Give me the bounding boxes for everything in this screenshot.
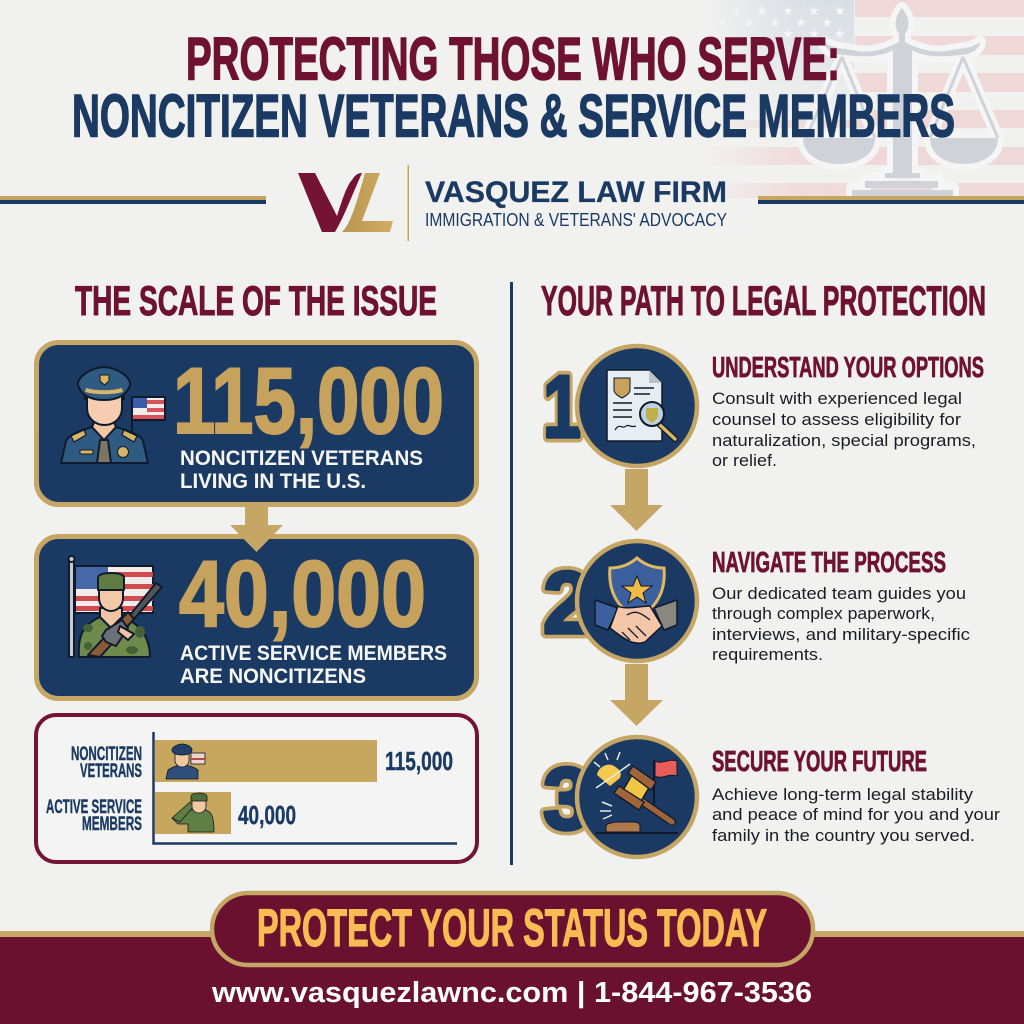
header rule: left [0, 196, 266, 204]
caption: LIVING IN THE U.S. [180, 470, 366, 493]
header rule: right [758, 196, 1024, 204]
number 2: 2 [543, 553, 591, 652]
step 2 text: through complex paperwork, [712, 604, 935, 623]
step 3 text: Achieve long-term legal stability [712, 785, 974, 804]
number 3: 3 [543, 749, 591, 848]
value: 115,000 [385, 746, 453, 776]
background flag and scales of justice: ★ [756, 3, 768, 18]
logo: Vasquez Law Firm: VASQUEZ LAW FIRM [425, 176, 727, 209]
call to action button [212, 893, 813, 965]
chart axes [154, 732, 457, 844]
step 1 text: counsel to assess eligibility for [712, 410, 961, 429]
footer band [0, 931, 1024, 1024]
panel: 115,000 veterans [36, 342, 476, 504]
arrow [610, 664, 663, 726]
background flag and scales of justice: ★ [717, 15, 729, 30]
background flag and scales of justice [736, 0, 1024, 198]
background flag and scales of justice: ★ [808, 3, 820, 18]
value: 40,000 [238, 800, 296, 830]
heading: the scale of the issue: THE SCALE OF THE ISSUE [75, 277, 437, 324]
step 2 [543, 541, 971, 726]
background flag and scales of justice: ★ [834, 3, 846, 18]
statistic: 40,000: 40,000 [179, 541, 426, 646]
background flag and scales of justice: ★ [834, 26, 846, 41]
background flag and scales of justice: ★ [795, 15, 807, 30]
step 1 text: or relief. [712, 451, 777, 470]
caption [180, 447, 423, 493]
step 3 [543, 737, 1000, 857]
bar: noncitizen veterans [71, 740, 453, 782]
step 1 text: Consult with experienced legal [712, 389, 962, 408]
bar label: NONCITIZEN [71, 743, 142, 765]
step 3 text: and peace of mind for you and your [712, 805, 1000, 824]
arrow [610, 469, 663, 531]
step 2 text [712, 547, 971, 664]
background flag and scales of justice: ★ [743, 15, 755, 30]
icon: small officer [166, 744, 205, 779]
background flag and scales of justice: ★ [782, 3, 794, 18]
logo: Vasquez Law Firm: IMMIGRATION & VETERANS' ADVOCACY [425, 210, 727, 230]
step 3 text: family in the country you served. [712, 826, 975, 845]
icon: officer with flag [61, 367, 165, 463]
background flag and scales of justice: ★ [808, 26, 820, 41]
icon circle: document review [577, 346, 697, 466]
step 2 text: interviews, and military-specific [712, 625, 971, 644]
number 2: 2 [543, 553, 591, 652]
panel: 40,000 service members [36, 536, 476, 698]
step 2 text: requirements. [712, 645, 823, 664]
bar label [46, 796, 142, 835]
contact line: www.vasquezlawnc.com | 1-844-967-3536 [211, 977, 812, 1009]
number 3: 3 [543, 749, 591, 848]
background flag and scales of justice: ★ [703, 3, 715, 18]
icon: saluting soldier [172, 793, 214, 832]
step 1 [543, 346, 984, 531]
panel: bar chart [36, 715, 477, 862]
scales halo [803, 8, 998, 197]
statistic: 115,000: 115,000 [173, 348, 444, 453]
logo: Vasquez Law Firm [298, 165, 727, 241]
number 1: 1 [543, 357, 581, 456]
icon circle: gavel and flag [577, 737, 697, 857]
title [72, 26, 955, 150]
background flag and scales of justice: ★ [730, 3, 742, 18]
step 1 text [712, 352, 984, 470]
background flag and scales of justice: ★ [769, 15, 781, 30]
caption: ACTIVE SERVICE MEMBERS [180, 642, 447, 665]
background flag and scales of justice: ★ [782, 26, 794, 41]
step 1 text: naturalization, special programs, [712, 431, 976, 450]
caption [180, 642, 447, 688]
arrow: between stat panels [230, 507, 283, 552]
bar label: ACTIVE SERVICE [46, 796, 142, 818]
caption: NONCITIZEN VETERANS [180, 447, 423, 470]
column divider [510, 282, 513, 865]
number 1: 1 [543, 357, 581, 456]
bar label: VETERANS [80, 760, 142, 782]
step 3 text [712, 746, 1000, 845]
bar label [71, 743, 142, 782]
background flag and scales of justice: ★ [821, 15, 833, 30]
icon circle: shield and handshake [577, 541, 697, 661]
step 2 text: Our dedicated team guides you [712, 584, 966, 603]
icon: soldier with flag [68, 556, 162, 657]
bar label: MEMBERS [82, 813, 142, 835]
bar: active service members [46, 792, 296, 835]
caption: ARE NONCITIZENS [180, 665, 366, 688]
